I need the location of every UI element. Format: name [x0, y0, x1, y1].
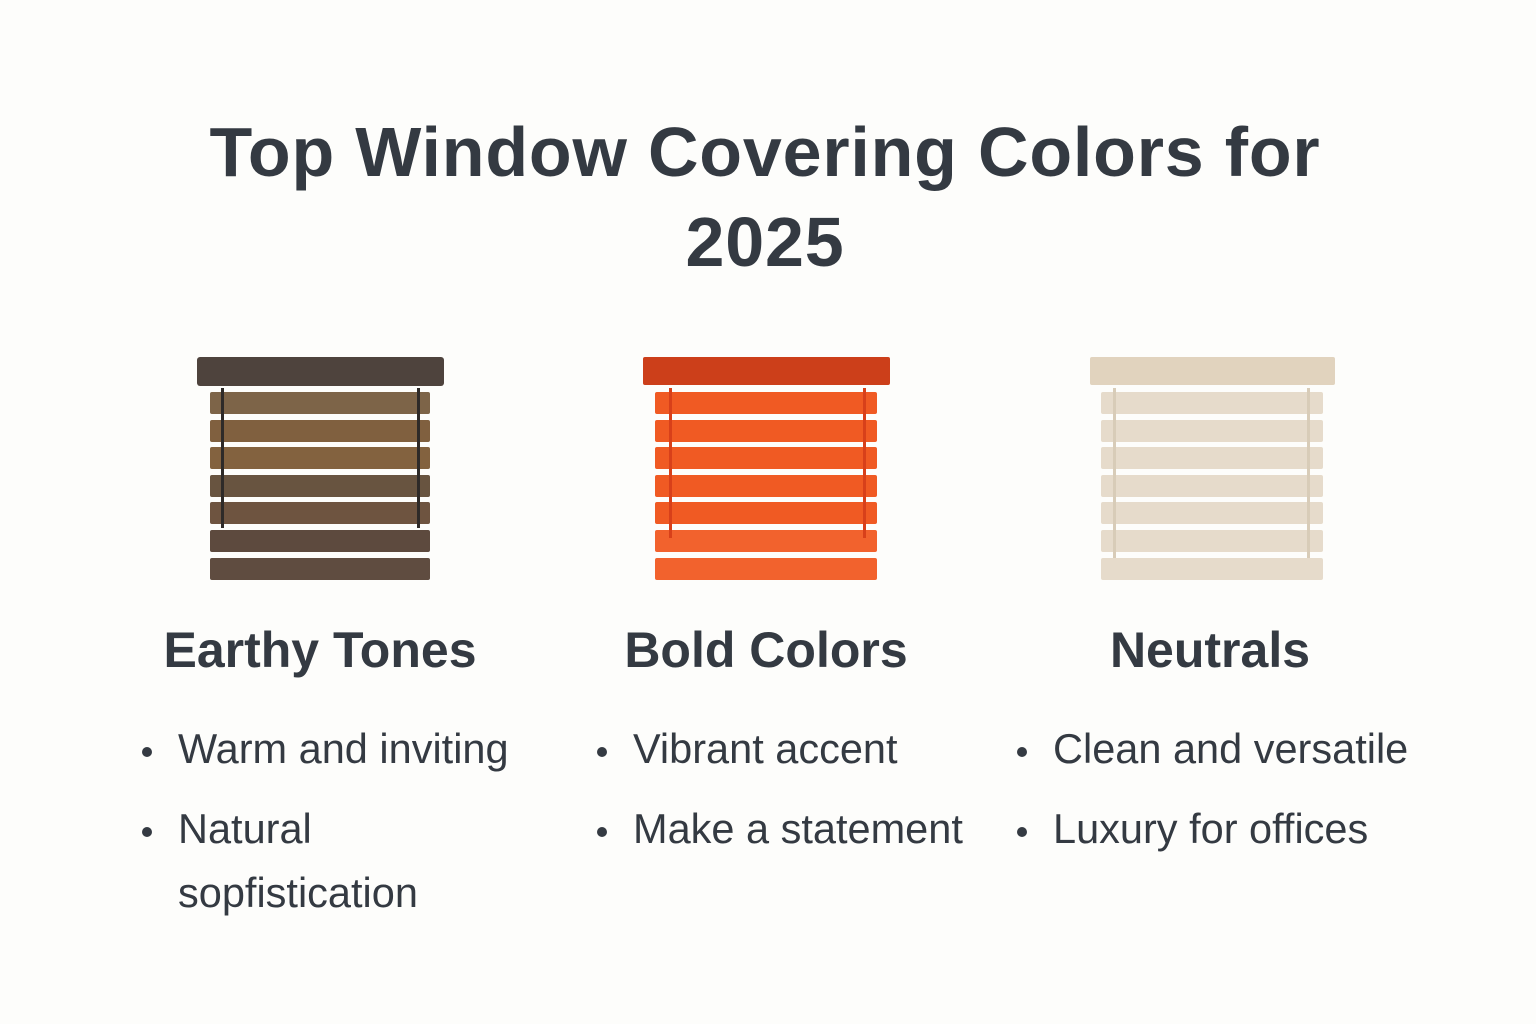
title: Top Window Covering Colors for: [210, 113, 1320, 191]
icon: bold blind: [643, 357, 890, 580]
icon: earthy blind: [197, 357, 444, 580]
heading: earthy tones: Earthy Tones: [163, 622, 477, 678]
title: 2025: [686, 203, 844, 281]
bullets: earthy: Warm and inviting: [178, 725, 509, 772]
bullets: neutrals: Clean and versatile: [1053, 725, 1408, 772]
bullets: bold: Vibrant accent: [633, 725, 898, 772]
bullets: earthy: Natural: [178, 805, 312, 852]
bullets: earthy: [142, 725, 509, 916]
heading: bold colors: Bold Colors: [624, 622, 908, 678]
heading: neutrals: Neutrals: [1110, 622, 1310, 678]
icon: neutral blind: [1090, 357, 1335, 580]
title: [210, 113, 1320, 281]
bullets: neutrals: Luxury for offices: [1053, 805, 1368, 852]
bullets: bold: [597, 725, 963, 852]
bullets: neutrals: [1017, 725, 1408, 852]
bullets: earthy: sopfistication: [178, 869, 418, 916]
bullets: bold: Make a statement: [633, 805, 963, 852]
